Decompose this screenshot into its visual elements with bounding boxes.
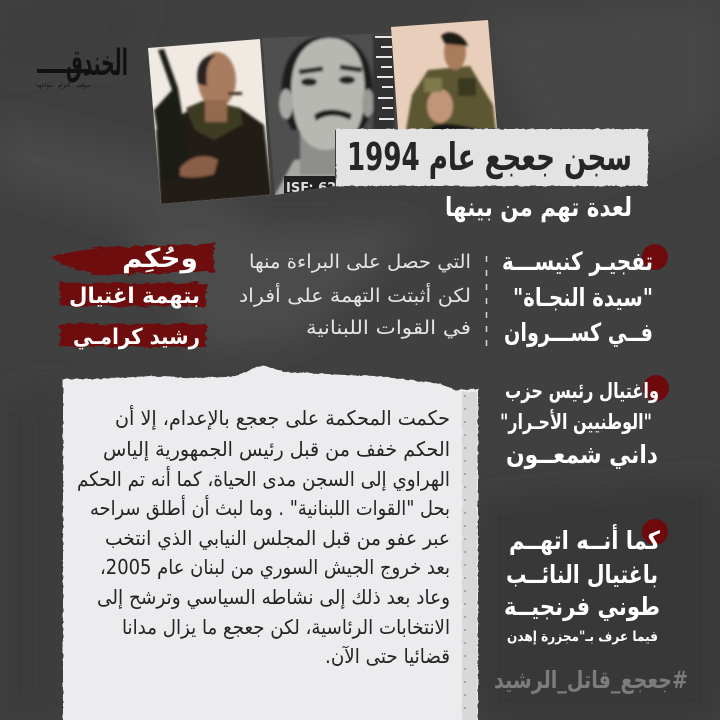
photo: grayscale mugshot: ISF: 62 xyxy=(286,181,336,196)
item: Frangieh assassination: كما أنــه اتهــم xyxy=(509,524,660,556)
logo: Al-Khandaq: موقف . التزام . مواجهة xyxy=(36,82,90,89)
red label: charged with assassination: بتهمة اغتيال xyxy=(69,284,200,309)
item: Frangieh assassination xyxy=(504,519,668,645)
title banner xyxy=(336,129,648,186)
subtitle: لعدة تهم من بينها xyxy=(445,193,632,223)
photo: soldier with beret xyxy=(391,20,497,130)
item: Chamoun assassination: داني شمعــون xyxy=(506,440,658,470)
text block: acquittal note: التي حصل على البراءة منها xyxy=(249,251,471,273)
text block: verdict history: بعد خروج الجيش السوري من لبنان عام 2005، xyxy=(100,555,450,580)
icon: red dot xyxy=(642,244,668,270)
text block: verdict history xyxy=(77,405,450,668)
text block: verdict history: قضائيا حتى الآن. xyxy=(325,644,450,668)
item: church bombing: "سيدة النجـاة" xyxy=(513,283,653,312)
red label: Rashid Karami: رشيد كرامـي xyxy=(73,325,200,350)
title banner: سجن جعجع عام 1994 xyxy=(347,135,632,180)
red label: verdict xyxy=(48,244,214,275)
text block: verdict history: الحكم خفف من قبل رئيس الجمهورية إلياس xyxy=(103,437,450,462)
item: Chamoun assassination: "الوطنيين الأحـرار" xyxy=(500,408,652,434)
item: Chamoun assassination xyxy=(500,375,669,470)
text block: verdict history: بحل "القوات اللبنانية" . وما لبث أن أطلق سراحه xyxy=(90,495,450,520)
item: Frangieh assassination: طوني فرنجيــة xyxy=(504,592,660,622)
item: Frangieh assassination: فيما عرف بـ"مجزرة إهدن xyxy=(507,629,658,645)
text block: acquittal note xyxy=(239,251,471,339)
icon: red dot xyxy=(642,519,668,545)
logo: Al-Khandaq xyxy=(36,43,128,89)
text block: verdict history: عبر عفو من قبل المجلس النيابي الذي انتخب xyxy=(105,526,450,551)
panel: torn paper xyxy=(63,365,478,720)
item: Frangieh assassination: باغتيال النائــب xyxy=(506,560,658,589)
photo: man with rifle xyxy=(148,39,271,204)
text block: verdict history: الانتخابات الرئاسية، لكن جعجع ما يزال مدانا xyxy=(122,615,450,639)
text block: verdict history: الهراوي إلى السجن مدى الحياة، كما أنه تم الحكم xyxy=(77,466,450,492)
red label: verdict: وحُكِم xyxy=(122,244,198,274)
icon: red dot xyxy=(643,375,669,401)
photo: grayscale mugshot xyxy=(262,33,397,195)
text block: acquittal note: لكن أثبتت التهمة على أفراد xyxy=(239,283,471,307)
text block: verdict history: حكمت المحكمة على جعجع بالإعدام، إلا أن xyxy=(115,405,450,431)
item: church bombing: تفجيـر كنيســـة xyxy=(502,247,653,277)
item: Chamoun assassination: واغتيال رئيس حزب xyxy=(505,379,659,403)
text block: verdict history: وعاد بعد ذلك إلى نشاطه السياسي وترشح إلى xyxy=(97,585,450,610)
logo: Al-Khandaq: الخندق xyxy=(66,43,128,84)
text block: acquittal note: في القوات اللبنانية xyxy=(306,317,471,339)
item: church bombing xyxy=(502,244,668,348)
item: church bombing: فــي كســـروان xyxy=(504,318,653,348)
